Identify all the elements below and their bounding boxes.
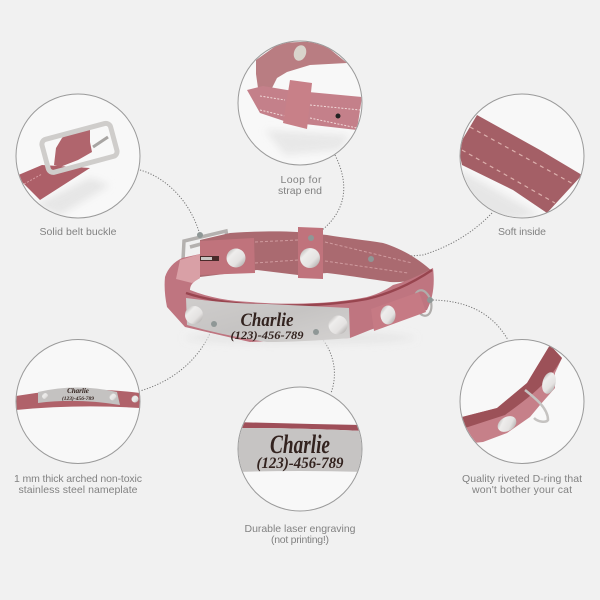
strap end light area	[176, 254, 200, 283]
panel: laser engraving: (123)-456-789	[256, 455, 344, 472]
dotted connector: loop	[311, 155, 344, 238]
label: loop for strap end: Loop for	[280, 174, 322, 186]
dotted connector: D-ring	[430, 300, 508, 340]
plate right rivet	[328, 316, 348, 334]
panel: arched nameplate: Charlie	[67, 387, 89, 395]
label: laser engraving	[244, 523, 356, 546]
panel: arched nameplate: (123)-456-789	[62, 395, 94, 402]
inner back strap	[200, 231, 433, 282]
buckle slot	[200, 256, 219, 261]
label: loop for strap end	[278, 174, 322, 197]
nameplate engraving	[230, 310, 304, 342]
panel: buckle	[16, 94, 140, 218]
D-ring	[412, 288, 434, 318]
label: D-ring: Quality riveted D-ring that	[462, 473, 582, 485]
panel: D-ring	[460, 340, 584, 464]
panel: arched nameplate	[16, 340, 140, 464]
label: arched nameplate	[14, 473, 142, 496]
label: D-ring	[462, 473, 582, 496]
collar shadow	[185, 332, 415, 344]
front outer strap	[165, 254, 434, 342]
strap inner edge	[186, 270, 432, 306]
label: laser engraving: (not printing!)	[271, 534, 329, 546]
D-ring tab	[371, 292, 426, 331]
nameplate engraving: Charlie	[240, 310, 294, 331]
tab rivet	[226, 248, 246, 268]
label: arched nameplate: 1 mm thick arched non-toxic	[14, 473, 142, 485]
inner stitching	[255, 240, 412, 273]
label: loop for strap end: strap end	[278, 185, 322, 197]
label: soft inside: Soft inside	[498, 226, 546, 238]
dotted connector: nameplate	[140, 324, 214, 391]
panel: soft inside	[455, 94, 584, 222]
loop rivet	[300, 248, 320, 268]
label: D-ring: won't bother your cat	[471, 484, 572, 496]
keeper loop	[298, 227, 323, 279]
nameplate engraving: (123)-456-789	[230, 328, 304, 342]
dotted connector: buckle	[140, 170, 200, 235]
buckle behind strap	[183, 231, 227, 260]
dotted connector: engraving	[316, 332, 334, 393]
panel: laser engraving	[236, 387, 364, 511]
nameplate	[186, 298, 350, 342]
callout dots	[197, 232, 433, 335]
main collar	[165, 227, 434, 344]
label: laser engraving: Durable laser engraving	[244, 523, 356, 535]
dotted connector: soft inside	[371, 213, 492, 259]
label: buckle: Solid belt buckle	[40, 226, 117, 238]
plate left rivet	[185, 306, 203, 324]
strap tab with rivet	[200, 238, 255, 275]
panel: laser engraving: Charlie	[270, 430, 330, 459]
panel: loop for strap end	[238, 41, 362, 165]
label: arched nameplate: stainless steel nameplate	[18, 484, 138, 496]
D-ring rivet	[380, 306, 396, 324]
